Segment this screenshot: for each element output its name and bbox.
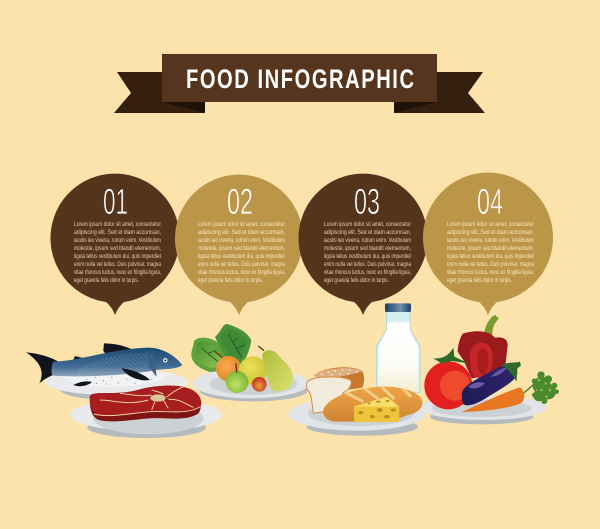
icon: tomato <box>424 348 472 409</box>
text block 04: adipiscing elit. Sed et diam accumsan, <box>447 230 534 236</box>
icon: small red apple <box>252 377 267 392</box>
icon: bread loaf <box>306 367 364 413</box>
fish on plate <box>26 343 188 400</box>
text block 03: enim nulla vel tellus. Duis pulvinar, magna <box>324 262 412 268</box>
panel: bubble 02 <box>175 175 303 315</box>
text block 03: Lorem ipsum dolor sit amet, consectetur <box>324 222 411 228</box>
plate <box>70 398 222 438</box>
plate <box>45 369 188 400</box>
icon: orange apple <box>215 352 241 381</box>
text block 02: adipiscing elit. Sed et diam accumsan, <box>198 230 285 236</box>
icon: fish <box>26 343 182 387</box>
panel: bubble 03 <box>298 174 428 315</box>
number 01: 01 <box>103 181 128 222</box>
text block 02: Lorem ipsum dolor sit amet, consectetur <box>198 222 285 228</box>
bread plate <box>288 397 425 436</box>
text block 04: eget gravida felis dolor in turpis. <box>447 278 512 284</box>
text block 01: Lorem ipsum dolor sit amet, consectetur <box>74 222 161 228</box>
bubble shape 02 <box>175 175 303 315</box>
text block 04: vitae rhoncus luctus, nunc ex fringilla ligula, <box>447 270 534 276</box>
icon: lettuce leaves <box>193 326 249 370</box>
text block 01 <box>74 222 162 284</box>
title: FOOD INFOGRAPHIC <box>186 64 414 94</box>
text block 02 <box>198 222 286 284</box>
icon: carrot <box>462 387 524 412</box>
icon: baguette <box>323 387 422 422</box>
text block 01: molestie, ipsum sed blandit elementum, <box>74 246 161 252</box>
icon: green apple <box>226 363 248 393</box>
panel: bubble 01 <box>50 174 180 315</box>
banner left fold <box>162 102 205 113</box>
text block 02: enim nulla vel tellus. Duis pulvinar, magna <box>198 262 286 268</box>
icon: cheese <box>354 397 399 422</box>
plate <box>192 368 309 401</box>
number 02: 02 <box>227 181 253 222</box>
icon: steak <box>90 386 201 421</box>
text block 03: vitae rhoncus luctus, nunc ex fringilla ligula, <box>324 270 411 276</box>
text block 02: ligula tellus vestibulum dui, quis imperdiet <box>198 254 285 260</box>
text block 02: vitae rhoncus luctus, nunc ex fringilla ligula, <box>198 270 285 276</box>
text block 02: iaculis leo viverra, rutrum enim. Vestibulum <box>198 238 285 244</box>
text block 04: molestie, ipsum sed blandit elementum, <box>447 246 534 252</box>
icon: milk bottle <box>377 303 420 392</box>
fruit and vegetable plate <box>192 326 309 401</box>
icon: yellow apple <box>239 356 267 385</box>
steak on plate <box>70 386 222 438</box>
text block 03: iaculis leo viverra, rutrum enim. Vestibulum <box>324 238 411 244</box>
number 03: 03 <box>354 181 380 222</box>
text block 03: adipiscing elit. Sed et diam accumsan, <box>324 230 411 236</box>
banner right tail <box>394 72 485 113</box>
text block 04 <box>447 222 535 284</box>
text block 02: eget gravida felis dolor in turpis. <box>198 278 263 284</box>
banner right fold <box>394 102 437 113</box>
text block 01: ligula tellus vestibulum dui, quis imperdiet <box>74 254 161 260</box>
text block 01: vitae rhoncus luctus, nunc ex fringilla ligula, <box>74 270 161 276</box>
text block 04: enim nulla vel tellus. Duis pulvinar, magna <box>447 262 535 268</box>
icon: eggplant <box>462 362 521 405</box>
text block 01: eget gravida felis dolor in turpis. <box>74 278 139 284</box>
text block 03 <box>324 222 412 284</box>
text block 01: iaculis leo viverra, rutrum enim. Vestibulum <box>74 238 161 244</box>
icon: bell pepper <box>458 315 508 378</box>
text block 03: eget gravida felis dolor in turpis. <box>324 278 389 284</box>
text block 02: molestie, ipsum sed blandit elementum, <box>198 246 285 252</box>
text block 01: adipiscing elit. Sed et diam accumsan, <box>74 230 161 236</box>
panel: bubble 04 <box>423 173 553 315</box>
number 04: 04 <box>477 181 503 222</box>
text block 04: iaculis leo viverra, rutrum enim. Vestibulum <box>447 238 534 244</box>
banner left tail <box>114 72 205 113</box>
title banner <box>114 54 485 113</box>
text block 03: molestie, ipsum sed blandit elementum, <box>324 246 411 252</box>
vegetables, bottle and bread group <box>288 303 559 436</box>
text block 04: Lorem ipsum dolor sit amet, consectetur <box>447 222 534 228</box>
icon: parsley <box>523 371 559 404</box>
bubble shape 04 <box>423 173 553 315</box>
text block 01: enim nulla vel tellus. Duis pulvinar, magna <box>74 262 162 268</box>
bubble shape 01 <box>50 174 180 315</box>
text block 03: ligula tellus vestibulum dui, quis imperdiet <box>324 254 411 260</box>
icon: pear <box>258 346 293 391</box>
text block 04: ligula tellus vestibulum dui, quis imperdiet <box>447 254 534 260</box>
banner main band <box>162 54 437 102</box>
vegetable plate <box>420 395 547 424</box>
bubble shape 03 <box>298 174 428 315</box>
